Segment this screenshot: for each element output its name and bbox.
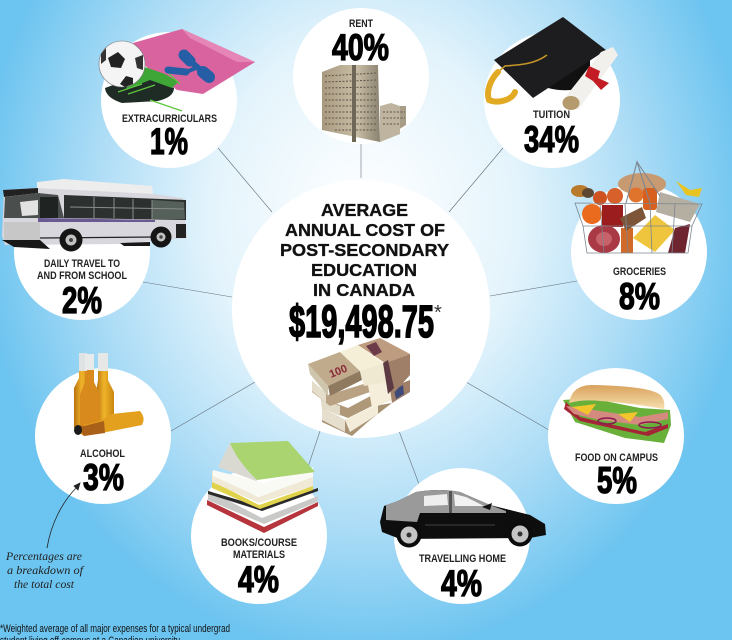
heading: average annual cost: IN CANADA: [313, 280, 415, 300]
total amount: $19,498.75: [289, 296, 434, 347]
heading: average annual cost: ANNUAL COST OF: [285, 220, 445, 240]
icon: black car: [380, 490, 546, 548]
percentage: 1%: [150, 121, 188, 162]
percentage: 8%: [619, 276, 660, 317]
note: percentages: [5, 549, 85, 591]
label: MATERIALS: [233, 549, 285, 561]
panel: rent: [293, 8, 429, 144]
icon: city bus: [2, 179, 187, 252]
label: [37, 258, 127, 282]
heading: average annual cost: [280, 200, 449, 300]
label: RENT: [349, 18, 373, 30]
label: DAILY TRAVEL TO: [44, 258, 120, 270]
icon: beer bottles: [74, 353, 144, 436]
heading: average annual cost: POST-SECONDARY: [280, 240, 449, 260]
connector lines: [143, 143, 577, 484]
panel: groceries: [571, 162, 707, 320]
note: percentages: a breakdown of: [7, 563, 85, 577]
icon: graduation cap and diploma: [488, 17, 618, 110]
percentage: 3%: [83, 457, 124, 498]
footnote: [0, 623, 230, 640]
panel: daily travel: [2, 179, 187, 321]
icon: submarine sandwich: [563, 385, 671, 443]
panel: tuition: [484, 17, 620, 168]
icon: apartment tower: [322, 65, 406, 142]
label: TRAVELLING HOME: [419, 553, 506, 565]
panel: extracurriculars: [99, 29, 255, 168]
icon: stacks of cash: 100: [328, 363, 349, 381]
icon: book stack: [207, 441, 318, 533]
label: GROCERIES: [613, 266, 666, 278]
label: FOOD ON CAMPUS: [575, 452, 658, 464]
heading: average annual cost: EDUCATION: [311, 260, 417, 280]
label: AND FROM SCHOOL: [37, 270, 127, 282]
label: BOOKS/COURSE: [221, 537, 297, 549]
label: EXTRACURRICULARS: [122, 113, 217, 125]
panel: total cost centre: [232, 180, 490, 438]
icon: sports gear: [99, 29, 255, 111]
panel: travelling home: [380, 468, 546, 604]
percentage: 4%: [441, 563, 482, 604]
label: [221, 537, 297, 561]
percentage: 34%: [524, 119, 579, 160]
heading: average annual cost: AVERAGE: [321, 200, 408, 220]
note: percentages: Percentages are: [5, 549, 83, 563]
label: ALCOHOL: [80, 448, 125, 460]
panel: food on campus: [548, 368, 684, 504]
label: TUITION: [533, 109, 570, 121]
percentage: 2%: [62, 280, 102, 321]
icon: basket of food: [571, 162, 702, 253]
asterisk: *: [434, 302, 442, 324]
icon: stacks of cash: [308, 338, 410, 436]
panel: alcohol: [35, 353, 171, 504]
arrow: note pointer: [47, 483, 80, 548]
panel: books: [191, 441, 327, 604]
percentage: 5%: [597, 460, 637, 501]
percentage: 4%: [238, 559, 279, 600]
footnote: *Weighted average of all major expenses for a typical undergrad: [0, 623, 230, 635]
note: percentages: the total cost: [14, 577, 75, 591]
percentage: 40%: [332, 27, 389, 68]
